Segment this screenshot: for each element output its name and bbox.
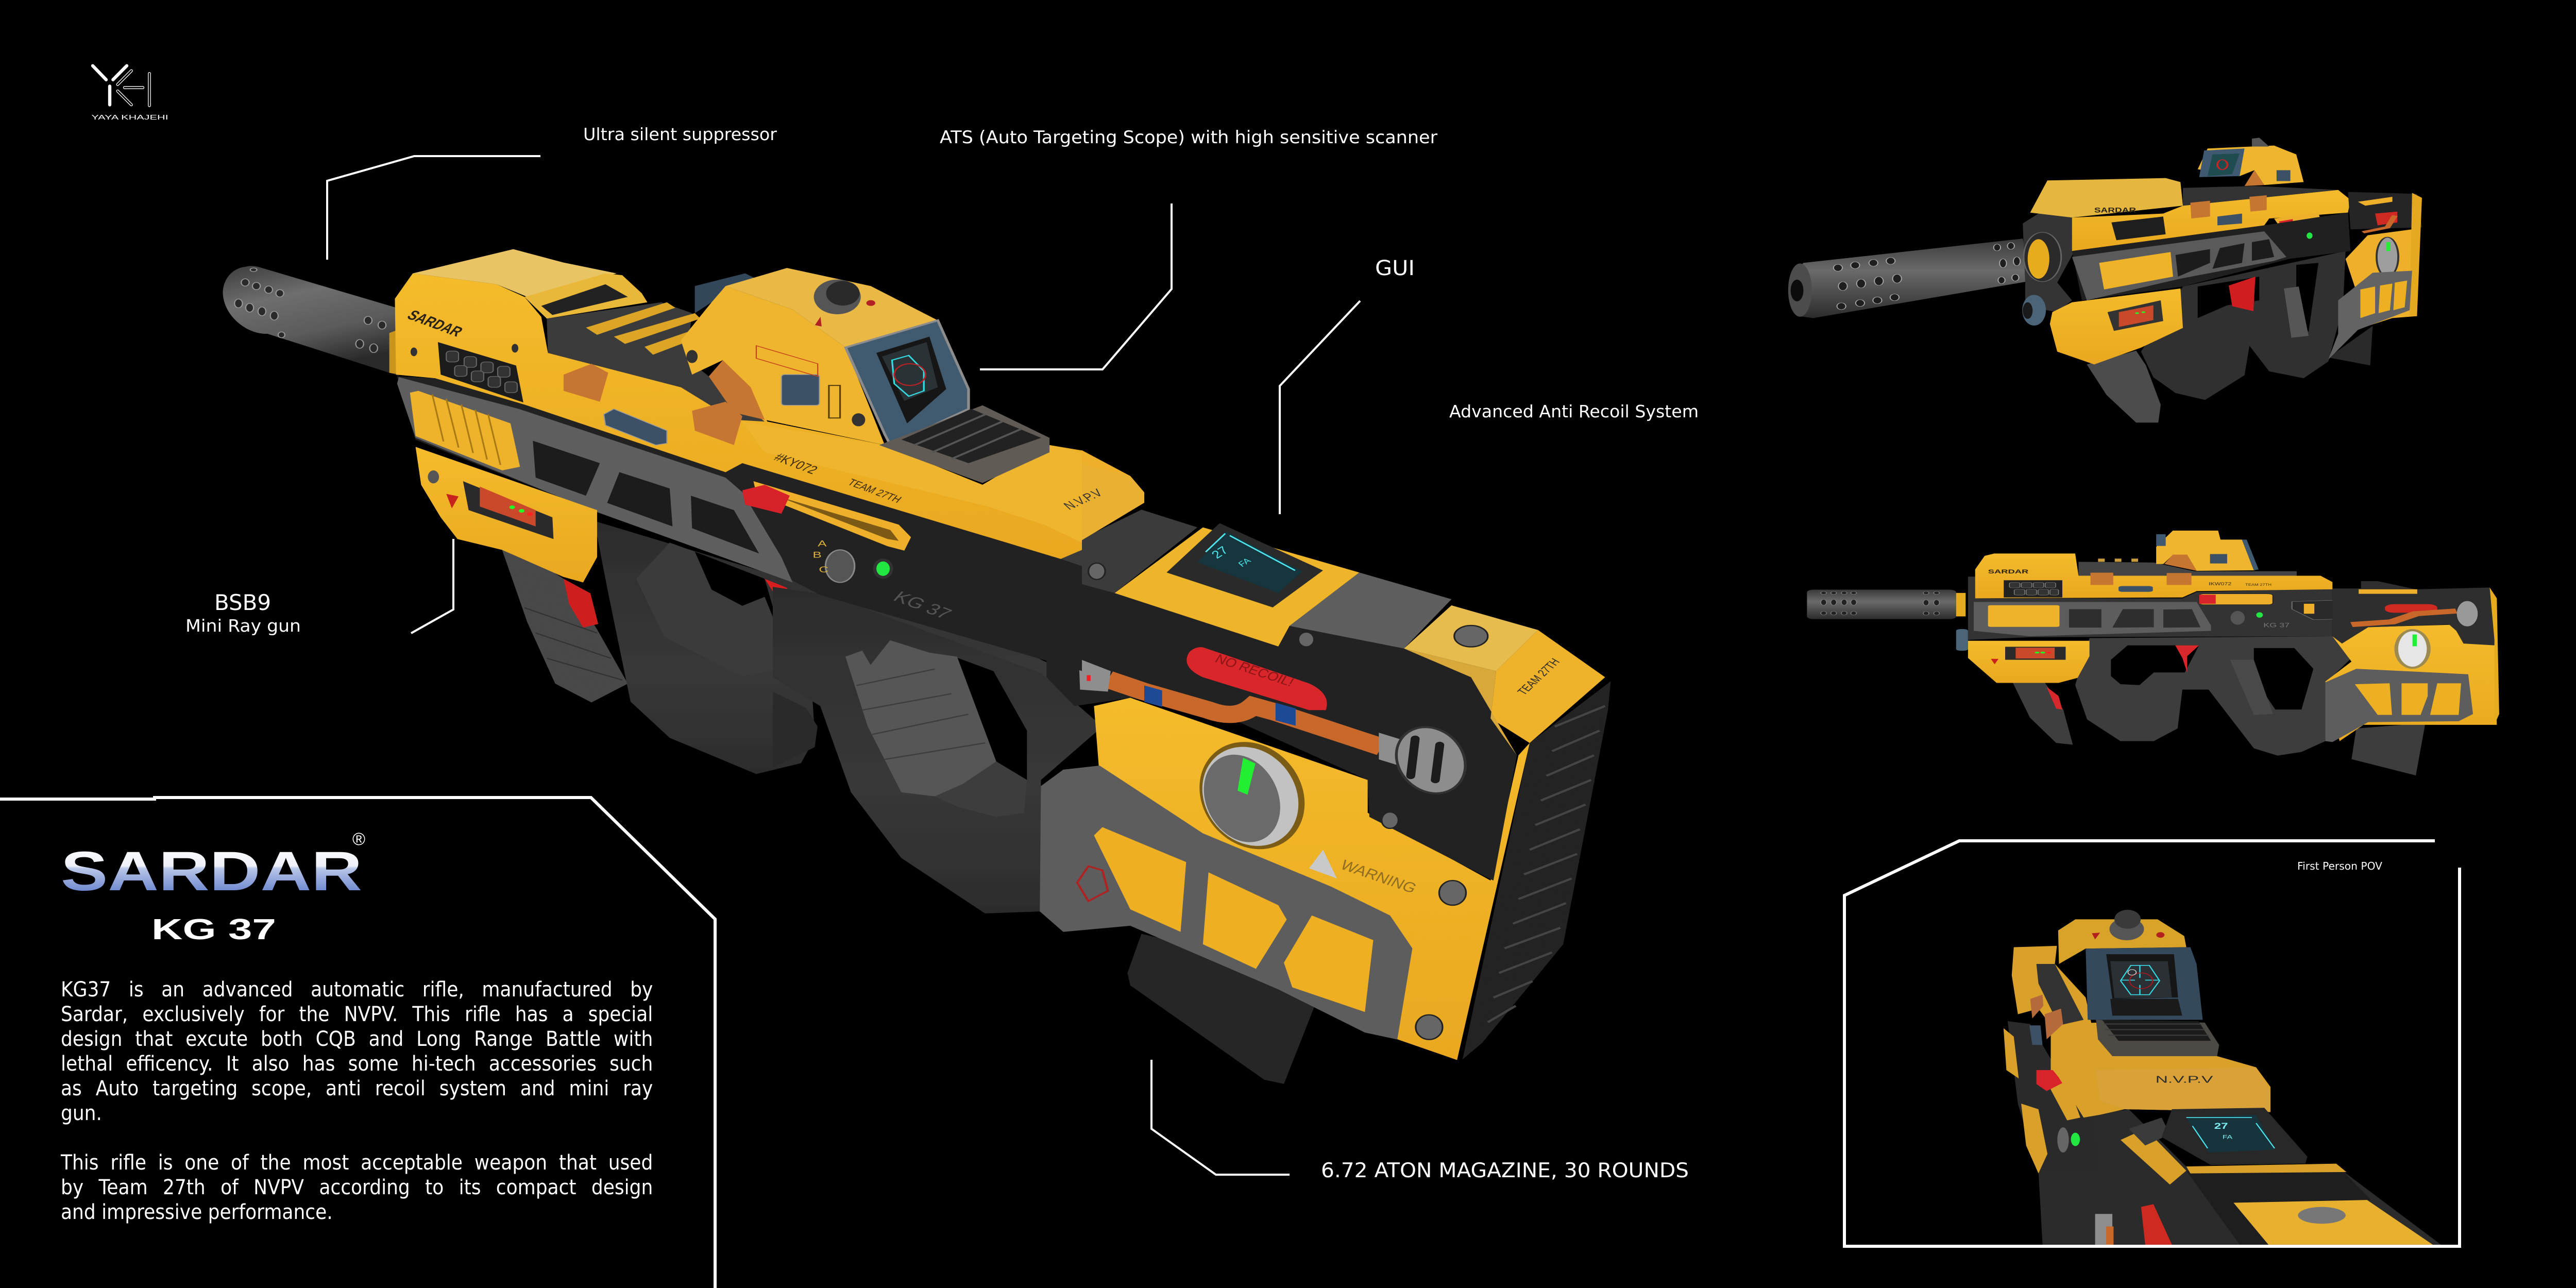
front dark plate and collar xyxy=(2022,213,2075,326)
callout text: Mini Ray gun: Mini Ray gun xyxy=(185,616,301,636)
GUI on rear: FA xyxy=(2223,1134,2233,1140)
scope xyxy=(2156,531,2259,571)
selector and indicator: C xyxy=(819,564,828,574)
front vent block xyxy=(438,342,523,402)
top yellow cover xyxy=(395,274,1082,559)
callout: GUI leader line xyxy=(1280,301,1360,514)
upper yellow body xyxy=(1975,553,2332,605)
text block: rifle description: and impressive performance. xyxy=(61,1200,333,1224)
callout text: ATS scope: ATS (Auto Targeting Scope) with high sensitive scanner xyxy=(940,127,1437,148)
GUI screen: 27 xyxy=(1209,545,1231,561)
GUI on rear xyxy=(2121,1108,2346,1184)
logo: Yaya Khajehi xyxy=(91,66,168,121)
logo: Yaya Khajehi: YAYA KHAJEHI xyxy=(91,113,168,121)
callout text: Ultra silent suppressor: Ultra silent suppressor xyxy=(583,124,777,144)
magazine xyxy=(1127,934,1315,1084)
ATS scope xyxy=(681,268,969,445)
receiver markings: N.V.P.V xyxy=(1060,486,1106,512)
rear stock xyxy=(2325,581,2499,742)
rear stock xyxy=(2328,192,2422,360)
main rifle render xyxy=(223,249,1611,1084)
warning label xyxy=(1309,850,1420,896)
brand logo: SARDAR: ® xyxy=(352,829,365,849)
main yellow top xyxy=(2050,1023,2270,1117)
upper yellow body: SARDAR xyxy=(1988,568,2028,574)
lower yellow housing xyxy=(1968,641,2090,683)
main yellow top: N.V.P.V xyxy=(2156,1074,2213,1084)
yellow rear cover xyxy=(949,450,1144,640)
scope xyxy=(2198,138,2303,186)
yellow cap xyxy=(2233,1200,2433,1245)
upper receiver xyxy=(395,249,1106,671)
suppressor xyxy=(223,266,400,376)
brand logo: SARDAR xyxy=(61,829,365,902)
ribbon cable xyxy=(1079,659,1415,770)
scope top xyxy=(2058,910,2187,964)
upper yellow body: TEAM 27TH xyxy=(2245,583,2272,586)
warning label: WARNING xyxy=(1337,857,1420,896)
red guard xyxy=(2046,687,2062,709)
rail teeth xyxy=(2102,558,2135,562)
receiver markings: #KY072 xyxy=(771,451,820,477)
top rail xyxy=(2078,562,2297,576)
lower yellow housing xyxy=(2050,289,2183,364)
stock: TEAM 27TH xyxy=(1514,656,1563,697)
text block: rifle description: lethal efficency. It also has some hi-tech accessories such xyxy=(61,1052,653,1076)
selector and indicator: B xyxy=(812,550,822,560)
gauge xyxy=(1187,735,1318,856)
text block: rifle description: design that excute both CQB and Long Range Battle with xyxy=(61,1027,653,1051)
brand logo: SARDAR: SARDAR xyxy=(61,840,362,902)
panel caption: First Person POV: First Person POV xyxy=(2297,860,2382,872)
GUI screen: FA xyxy=(1236,556,1253,568)
screws xyxy=(1047,563,1488,1040)
orange and blue controls xyxy=(564,364,742,445)
text block: rifle description: Sardar, exclusively for the NVPV. This rifle has a special xyxy=(61,1003,653,1026)
heat fin rail xyxy=(2096,1020,2219,1056)
BSB9 lower yellow housing xyxy=(416,447,597,582)
text block: rifle description: as Auto targeting scope, anti recoil system and mini ray xyxy=(61,1077,653,1100)
yellow left block xyxy=(2012,946,2092,1025)
selector and indicator xyxy=(812,538,893,582)
stock xyxy=(1040,510,1611,1060)
red anti recoil pill: NO RECOIL! xyxy=(1212,652,1297,689)
side view 1: three quarter render xyxy=(1788,138,2422,422)
receiver markings xyxy=(771,451,1106,623)
red pill and connector xyxy=(2095,1204,2172,1245)
left side yellow strip xyxy=(2004,1021,2100,1174)
foregrip xyxy=(502,550,628,702)
dark side rail xyxy=(2072,213,2350,300)
upper yellow body xyxy=(2030,178,2350,251)
receiver xyxy=(1968,577,2337,640)
callout text: BSB9: BSB9 xyxy=(214,590,271,615)
callout text: magazine: 6.72 ATON MAGAZINE, 30 ROUNDS xyxy=(1321,1159,1689,1182)
callout text: Advanced Anti Recoil System: Advanced Anti Recoil System xyxy=(1449,401,1699,421)
dark top rail xyxy=(524,274,765,421)
ribbed butt pad xyxy=(1463,682,1611,1059)
side view 2: flat side render xyxy=(1807,531,2499,775)
text block: rifle description xyxy=(61,978,653,1224)
receiver markings: TEAM 27TH xyxy=(845,477,904,505)
round latch xyxy=(1386,721,1475,799)
gray side rail xyxy=(397,377,792,582)
model name: KG 37: KG 37 xyxy=(151,913,276,946)
upper yellow body: IKW072 xyxy=(2209,582,2231,586)
red anti recoil pill xyxy=(1187,647,1327,710)
black band xyxy=(2187,1171,2371,1245)
selector and indicator: A xyxy=(818,538,827,548)
suppressor xyxy=(1788,239,2032,318)
scope housing and screen xyxy=(2086,947,2202,1020)
callout: suppressor leader line xyxy=(327,156,540,260)
text block: rifle description: This rifle is one of the most acceptable weapon that used xyxy=(61,1151,653,1175)
sight knob xyxy=(814,280,861,314)
callout: ATS leader line xyxy=(980,204,1172,369)
charging handle slot xyxy=(949,560,1055,640)
ejector slot xyxy=(742,481,911,551)
dark rail slot xyxy=(2037,964,2083,1025)
foregrip xyxy=(2011,679,2073,745)
suppressor xyxy=(1807,590,1968,651)
callout text: GUI: GUI xyxy=(1375,257,1415,280)
text block: rifle description: KG37 is an advanced automatic rifle, manufactured by xyxy=(61,978,653,1002)
gray magazine housing xyxy=(1040,766,1412,1040)
grip and frame xyxy=(2087,251,2372,422)
magazine xyxy=(2351,723,2426,775)
first person view render xyxy=(2004,910,2441,1245)
text block: rifle description: by Team 27th of NVPV according to its compact design xyxy=(61,1176,653,1199)
GUI screen xyxy=(1166,523,1323,607)
sight heat fins xyxy=(879,405,1049,483)
text block: rifle description: gun. xyxy=(61,1101,102,1125)
upper yellow body: SARDAR xyxy=(2094,206,2136,214)
brand mark on receiver: SARDAR xyxy=(403,308,466,340)
receiver: KG 37 xyxy=(2263,622,2290,629)
receiver markings: KG 37 xyxy=(889,588,956,623)
orange controls xyxy=(2029,995,2063,1045)
panel frame: first person view xyxy=(1844,841,2460,1246)
dark lower body xyxy=(2018,1104,2441,1245)
callout: BSB9 leader line xyxy=(411,539,453,633)
frame xyxy=(2075,636,2351,756)
polymer frame and grips xyxy=(595,521,1103,913)
callout: magazine leader line xyxy=(1151,1060,1290,1175)
panel frame: description xyxy=(0,798,715,1288)
GUI on rear: 27 xyxy=(2214,1122,2228,1131)
